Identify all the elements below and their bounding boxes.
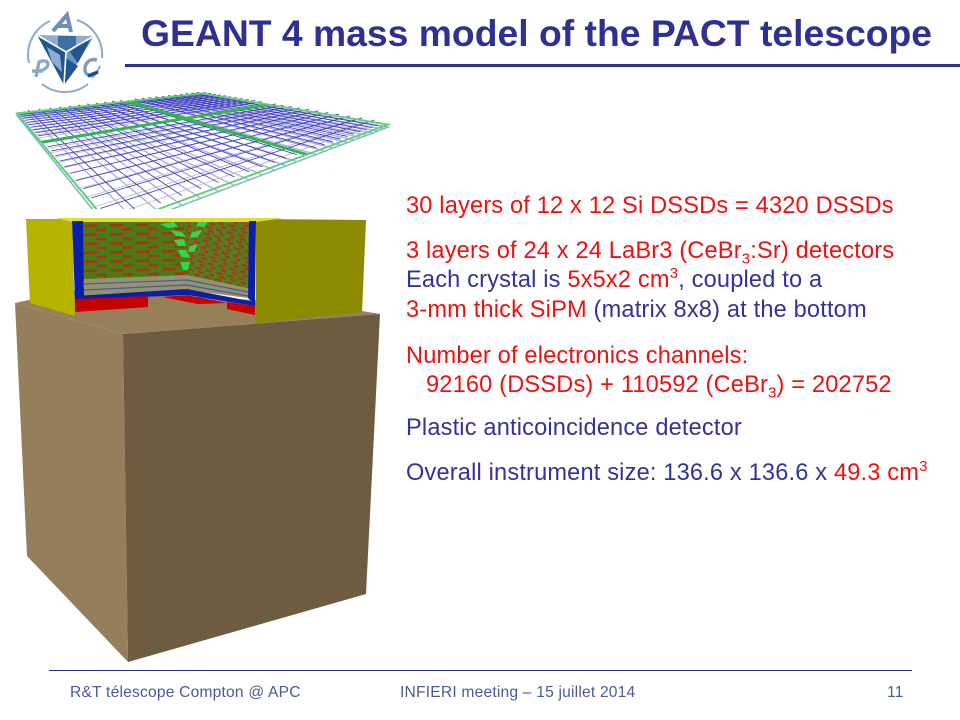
text: calorimeter description: 3 layers of 24 x 24 LaBr3 (CeBr3:Sr) detectors bbox=[406, 238, 894, 268]
text: DSSD layers: 30 layers of 12 x 12 Si DSSDs = 4320 DSSDs bbox=[406, 193, 894, 219]
wireframe: silicon tracker grid bbox=[15, 92, 392, 209]
footer rule bbox=[49, 670, 912, 671]
calorimeter: grey layers bbox=[84, 275, 248, 298]
grid: upper layer bbox=[18, 93, 383, 212]
interior: bright green corner highlights bbox=[160, 222, 208, 270]
text: electronics channels: 92160 (DSSDs) + 110592 (CeBr3) = 202752 bbox=[426, 372, 892, 402]
shield: left face bbox=[15, 303, 128, 662]
text: electronics channels bbox=[406, 343, 892, 402]
shield: top surface bbox=[15, 290, 380, 334]
yellow scintillator: right wall bbox=[256, 219, 366, 323]
footer: page number: 11 bbox=[887, 684, 904, 701]
title underline bbox=[125, 64, 960, 67]
grid: lower layer bbox=[17, 95, 388, 232]
grid: green module dividers and rim bbox=[17, 93, 388, 227]
SiPM: red blocks bbox=[75, 295, 255, 315]
text: calorimeter description: Each crystal is 5x5x2 cm3, coupled to a bbox=[406, 265, 822, 293]
plastic detector: blue side walls and floor bbox=[72, 221, 256, 306]
yellow scintillator: left wall bbox=[26, 219, 75, 316]
interior: left wall of detector layers bbox=[82, 222, 186, 281]
interior: right wall of detector layers bbox=[186, 222, 249, 289]
footer: center: INFIERI meeting – 15 juillet 2014 bbox=[400, 684, 635, 701]
footer: left: R&T télescope Compton @ APC bbox=[70, 684, 301, 701]
text: anticoincidence detector: Plastic anticoincidence detector bbox=[406, 415, 742, 441]
shield: right face bbox=[123, 314, 380, 662]
logo: APC triangle emblem bbox=[27, 10, 104, 93]
3D model: instrument cross-section and shield bbox=[15, 218, 380, 662]
text: instrument size: Overall instrument size: 136.6 x 136.6 x 49.3 cm3 bbox=[406, 458, 928, 486]
title: GEANT 4 mass model of the PACT telescope bbox=[141, 12, 932, 54]
text: calorimeter description: 3-mm thick SiPM (matrix 8x8) at the bottom bbox=[406, 297, 867, 323]
yellow scintillator: top rim bbox=[56, 218, 285, 222]
text: calorimeter description bbox=[406, 238, 894, 323]
text: electronics channels: Number of electronics channels: bbox=[406, 343, 748, 369]
